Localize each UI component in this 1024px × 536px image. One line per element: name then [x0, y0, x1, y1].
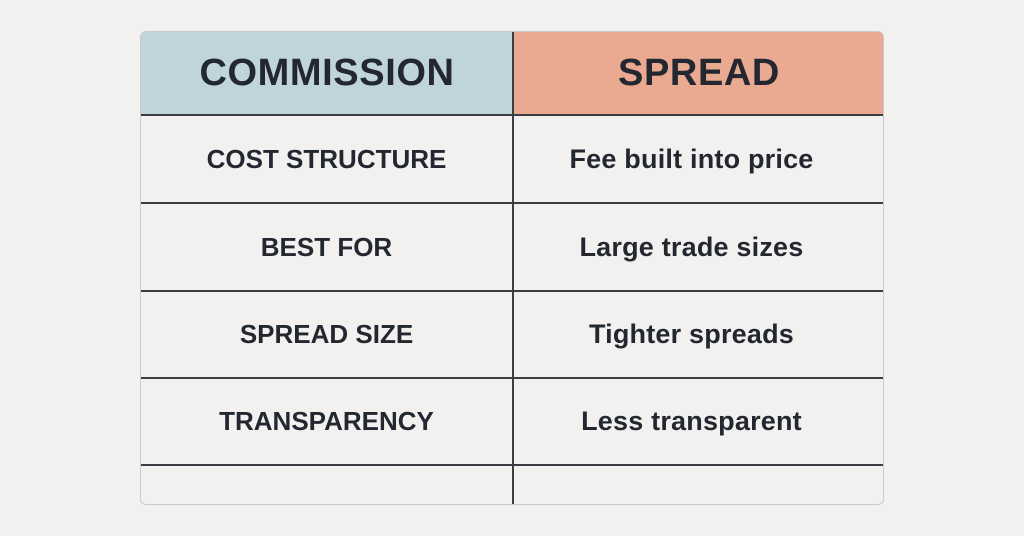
- row 2 right: Large trade sizes: [579, 232, 804, 262]
- row 4 left: TRANSPARENCY: [219, 406, 434, 436]
- header: commission: [141, 32, 513, 115]
- row 4 right: Less transparent: [581, 406, 802, 436]
- row 2 left: BEST FOR: [261, 232, 392, 262]
- row 3 right: Tighter spreads: [589, 319, 794, 349]
- header: spread: [513, 32, 885, 115]
- row 1 left: COST STRUCTURE: [207, 144, 446, 174]
- row 3 left: SPREAD SIZE: [240, 319, 413, 349]
- header: spread: SPREAD: [618, 52, 780, 94]
- row 1 right: Fee built into price: [569, 144, 814, 174]
- comparison table: [140, 31, 884, 505]
- header: commission: COMMISSION: [199, 52, 455, 94]
